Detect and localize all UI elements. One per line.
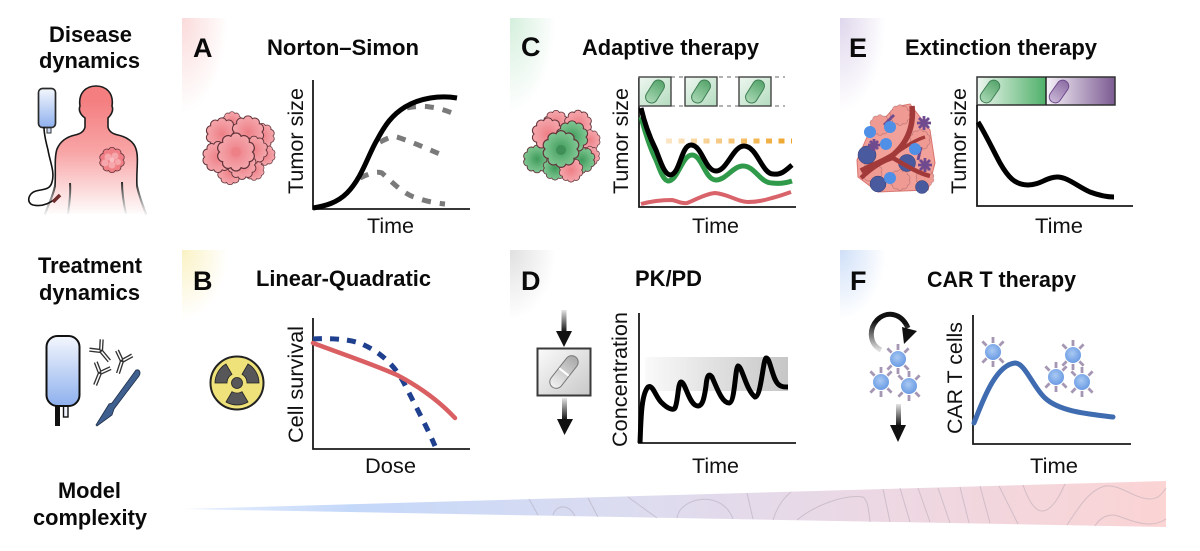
icon: tumor with vasculature [857,104,935,194]
panel E: Extinction therapy: E [849,33,867,63]
CAR T cells in chart [982,337,1093,397]
panel A: Norton–Simon: Time [367,214,414,238]
icon: tumor cluster [203,112,275,185]
panel E: Extinction therapy: Time [1035,214,1083,238]
panel D: PK/PD: D [521,266,540,296]
left heading: model complexity: complexity [33,505,148,530]
icon: radiation symbol [210,356,264,410]
untreated growth curve [313,97,457,208]
therapeutic window [645,357,788,391]
dashed survival curve [313,339,435,446]
panel B: Linear-Quadratic [182,250,470,478]
panel D: PK/PD: Time [692,454,739,478]
panel D: PK/PD: PK/PD [635,266,702,291]
panel C: Adaptive therapy [510,18,796,238]
solid survival curve [313,343,455,418]
icon: input arrow [556,310,572,347]
panel F: CAR T therapy: F [850,266,866,296]
icon: pill in box [538,348,590,396]
panel B: Linear-Quadratic: B [193,266,212,296]
icon: small tumor on chest [100,147,124,173]
icon: treatments (infusion bag, antibodies, scalpel) [46,336,140,426]
panel B: Linear-Quadratic: Cell survival [284,326,308,443]
total tumor curve [641,108,792,175]
panel F: CAR T therapy: Time [1030,454,1078,478]
chart axes [977,105,1133,206]
panel A: Norton–Simon: Norton–Simon [267,35,419,60]
sensitive population curve [641,117,792,183]
chart axes [639,313,796,443]
left heading: disease dynamics: dynamics [39,48,140,73]
threshold dotted line [666,138,792,144]
panel B: Linear-Quadratic: Linear-Quadratic [256,266,431,291]
panel F: CAR T therapy [840,250,1131,478]
resistant population curve [641,192,791,204]
panel E: Extinction therapy: Extinction therapy [905,35,1098,60]
panel E: Extinction therapy: Tumor size [947,88,971,194]
tumor decline curve [978,122,1114,197]
icon: mixed tumor cluster [524,110,600,182]
panel A: Norton–Simon: Tumor size [284,88,308,194]
chart axes [973,315,1131,444]
icon: output arrow [557,398,573,435]
icon: patient with IV bag [29,86,146,214]
chart axes [313,318,470,449]
panel A: Norton–Simon [182,18,470,238]
panel F: CAR T therapy: CAR T therapy [927,267,1077,292]
panel A: Norton–Simon: A [193,33,212,63]
panel C: Adaptive therapy: C [521,32,540,62]
panel B: Linear-Quadratic: Dose [365,454,416,478]
panel C: Adaptive therapy: Tumor size [609,88,633,194]
chart axes [639,78,796,207]
icon: down arrow [890,404,906,442]
left heading: model complexity: Model [58,478,121,503]
complexity wedge [183,481,1166,527]
left heading: model complexity [33,478,148,530]
panel C: Adaptive therapy: Adaptive therapy [582,35,760,60]
left heading: treatment dynamics: Treatment [38,253,143,278]
sequential treatment bar [977,77,1115,105]
CAR T expansion curve [974,363,1113,423]
left heading: treatment dynamics: dynamics [39,280,140,305]
icon: CAR T cell cluster [870,344,920,401]
chart axes [313,80,470,209]
treated tumor curves (dashed) [360,106,457,204]
concentration curve [640,358,788,443]
left heading: treatment dynamics [38,253,143,305]
panel D: PK/PD: Concentration [608,312,632,447]
left heading: disease dynamics: Disease [49,22,132,47]
panel D: PK/PD [510,250,796,478]
panel E: Extinction therapy [840,18,1133,238]
panel C: Adaptive therapy: Time [692,214,739,238]
icon: proliferation loop arrow [871,314,917,350]
panel F: CAR T therapy: CAR T cells [943,322,967,434]
left heading: disease dynamics [39,22,140,73]
treatment windows with pills [639,77,785,106]
